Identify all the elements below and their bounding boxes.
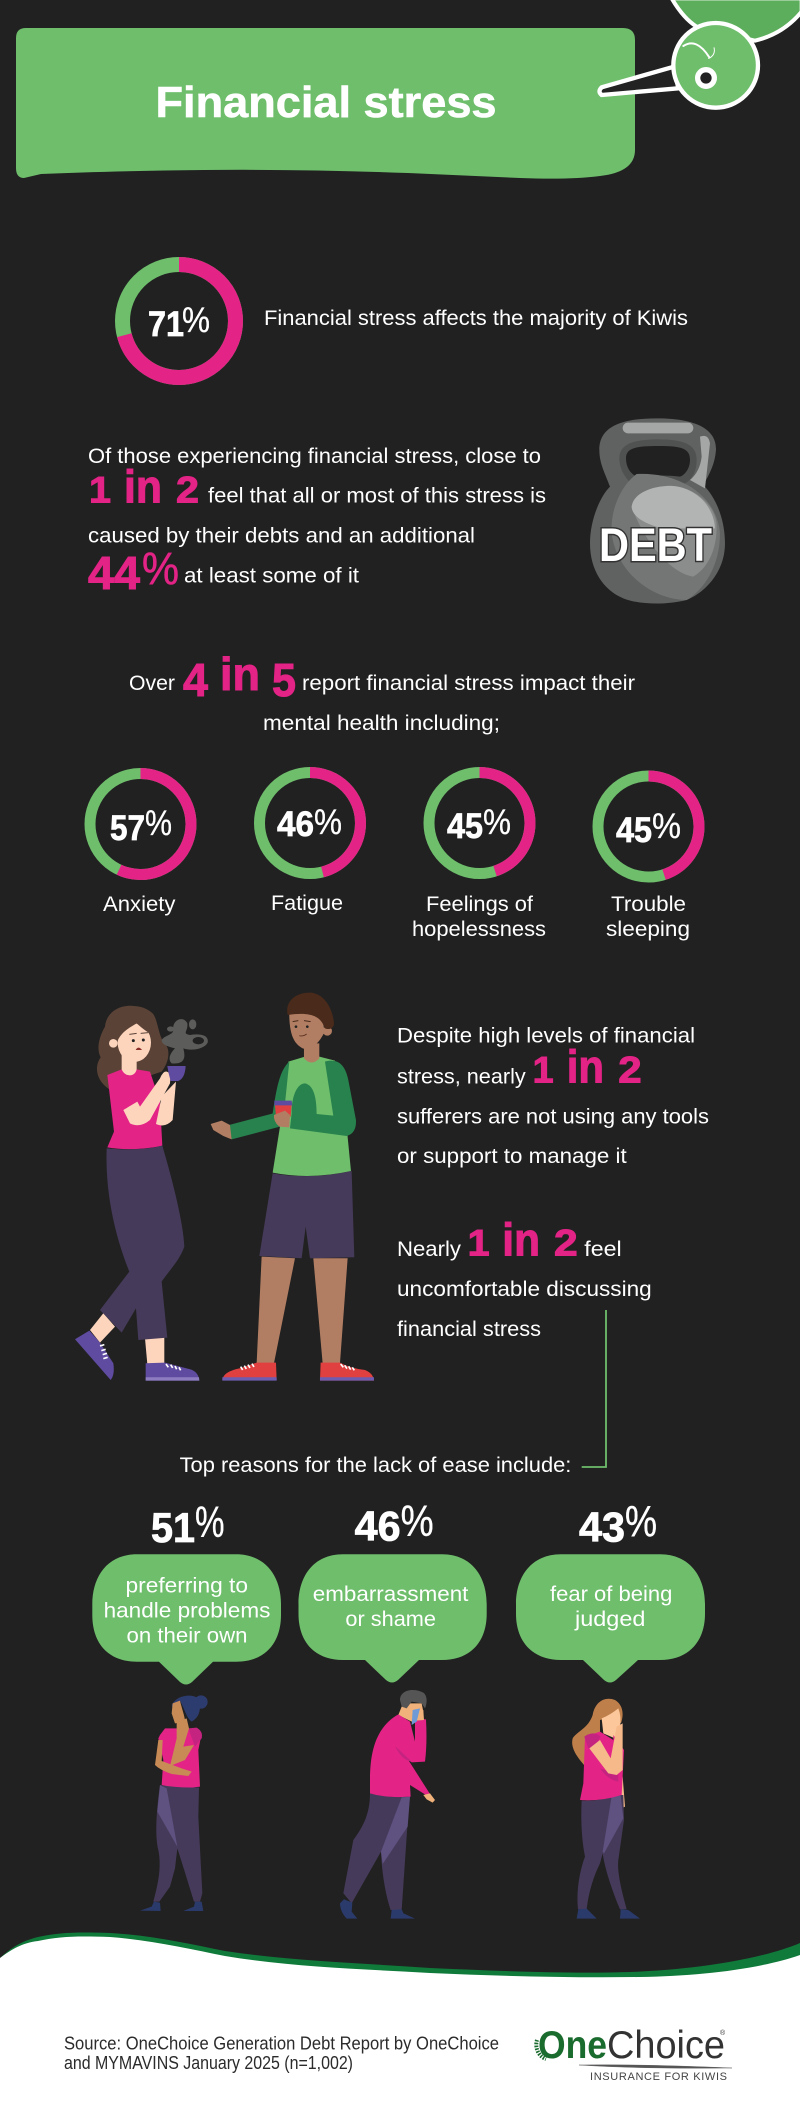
donut: anxiety 57% (90, 774, 191, 874)
source note: and MYMAVINS January 2025 (n=1,002) (64, 2053, 353, 2073)
reason 3: 43%: % (625, 1497, 657, 1546)
speech bubble 2: or shame (345, 1608, 436, 1631)
text block: uncomfortable discussing: in (502, 1214, 540, 1266)
reason 2: 46%: % (401, 1497, 434, 1546)
logo: OneChoice: INSURANCE FOR KIWIS (590, 2071, 727, 2083)
donut: trouble sleeping 45%: % (652, 807, 681, 846)
text block: not using tools: or support to manage it (397, 1145, 627, 1168)
text block: debt stress: % (142, 543, 179, 594)
text block: debt stress (88, 445, 546, 599)
logo: OneChoice: ® (720, 2029, 726, 2037)
text block: not using tools: in (567, 1041, 604, 1093)
speech bubble 2: embarrassment (313, 1583, 469, 1606)
text block: debt stress: caused by their debts and an additional (88, 524, 475, 548)
heading: mental health: Over (129, 672, 175, 695)
heading: mental health (129, 648, 635, 735)
title banner (16, 28, 635, 179)
heading: top reasons: Top reasons for the lack of ease include: (180, 1454, 571, 1477)
speech bubble 2 (298, 1554, 487, 1682)
text block: not using tools: sufferers are not using any tools (397, 1106, 709, 1129)
value: 57 (110, 809, 145, 848)
donut: 71% (122, 264, 236, 378)
label: feelings of hopelessness: hopelessness (412, 918, 546, 941)
speech bubble 1 (92, 1554, 281, 1684)
label: feelings of hopelessness (412, 893, 546, 941)
label: DEBT (599, 518, 712, 571)
text block: debt stress: 44 (88, 547, 140, 599)
text block: debt stress: feel that all or most of this stress is (208, 484, 546, 508)
text block: not using tools: stress, nearly (397, 1065, 526, 1088)
text block: debt stress: 1 (89, 470, 111, 510)
text block: not using tools: 2 (618, 1050, 642, 1091)
source note: Source: OneChoice Generation Debt Report by OneChoice (64, 2033, 499, 2053)
reason 3: 43% (579, 1497, 657, 1551)
reason 1: 51% (151, 1498, 224, 1551)
icon: debt kettlebell (590, 418, 725, 604)
figure: woman covering face (572, 1699, 640, 1919)
label: anxiety: Anxiety (103, 893, 176, 916)
value: 71 (148, 305, 184, 344)
donut: fatigue 46%: % (314, 803, 342, 842)
text block: uncomfortable discussing: 2 (554, 1223, 578, 1264)
text block: not using tools (397, 1025, 709, 1168)
reason 2: 46% (355, 1497, 434, 1550)
logo: OneChoice: Choice (607, 2024, 725, 2067)
text block: debt stress: in (124, 460, 162, 512)
text block: not using tools: 1 (533, 1050, 554, 1091)
text block: uncomfortable discussing: 1 (468, 1223, 490, 1264)
text block: uncomfortable discussing: financial stress (397, 1318, 541, 1341)
text block: not using tools: Despite high levels of financial (397, 1025, 695, 1048)
illustration: man with coffee (211, 993, 374, 1381)
text: majority of Kiwis: Financial stress affects the majority of Kiwis (264, 307, 688, 330)
heading: mental health: 4 (183, 654, 208, 706)
figure: woman thinking (140, 1695, 208, 1911)
title: Financial stress (156, 78, 497, 127)
value: 45 (447, 807, 483, 846)
logo: OneChoice (536, 2024, 732, 2083)
text block: uncomfortable discussing (397, 1214, 652, 1341)
label: trouble sleeping: Trouble (611, 893, 686, 916)
footer wave (0, 1932, 800, 2107)
label: trouble sleeping (606, 893, 690, 941)
logo: OneChoice: One (538, 2024, 607, 2067)
speech bubble 1: handle problems (104, 1600, 270, 1623)
text block: debt stress: Of those experiencing financial stress, close to (88, 445, 541, 468)
connector line (582, 1310, 606, 1467)
text block: uncomfortable discussing: Nearly (397, 1238, 462, 1261)
reason 3: 43%: 43 (579, 1504, 625, 1551)
illustration: woman with stressed cup (75, 1006, 208, 1381)
value: 46 (277, 805, 314, 844)
label: trouble sleeping: sleeping (606, 918, 690, 941)
reason 1: 51%: % (195, 1498, 224, 1547)
donut: hopelessness 45% (429, 772, 530, 874)
heading: mental health: report financial stress impact their (302, 672, 635, 695)
speech bubble 3: fear of being (550, 1583, 672, 1606)
speech bubble 1: preferring to (126, 1574, 248, 1597)
text block: uncomfortable discussing: feel (584, 1238, 622, 1261)
speech bubble 3 (516, 1554, 705, 1682)
heading: mental health: 5 (272, 654, 296, 706)
text block: uncomfortable discussing: uncomfortable discussing (397, 1278, 652, 1301)
label: feelings of hopelessness: Feelings of (426, 893, 533, 916)
text block: debt stress: at least some of it (184, 564, 359, 588)
donut: hopelessness 45%: % (483, 803, 511, 842)
text block: debt stress: 2 (176, 470, 199, 510)
figure: man with tissue (340, 1690, 435, 1919)
speech bubble 3: judged (574, 1608, 645, 1631)
donut: anxiety 57%: % (145, 804, 172, 843)
reason 1: 51%: 51 (151, 1504, 195, 1551)
donut: trouble sleeping 45% (598, 776, 699, 877)
reason 2: 46%: 46 (355, 1503, 401, 1550)
value: 45 (616, 811, 652, 850)
speech bubble 1: on their own (126, 1625, 248, 1648)
donut: 71%: % (182, 301, 210, 340)
heading: mental health: in (220, 648, 260, 700)
donut: fatigue 46% (260, 772, 360, 874)
icon: kiwi mascot (599, 0, 800, 108)
heading: mental health: mental health including; (263, 712, 500, 735)
label: fatigue: Fatigue (271, 892, 343, 915)
source note (64, 2033, 499, 2073)
